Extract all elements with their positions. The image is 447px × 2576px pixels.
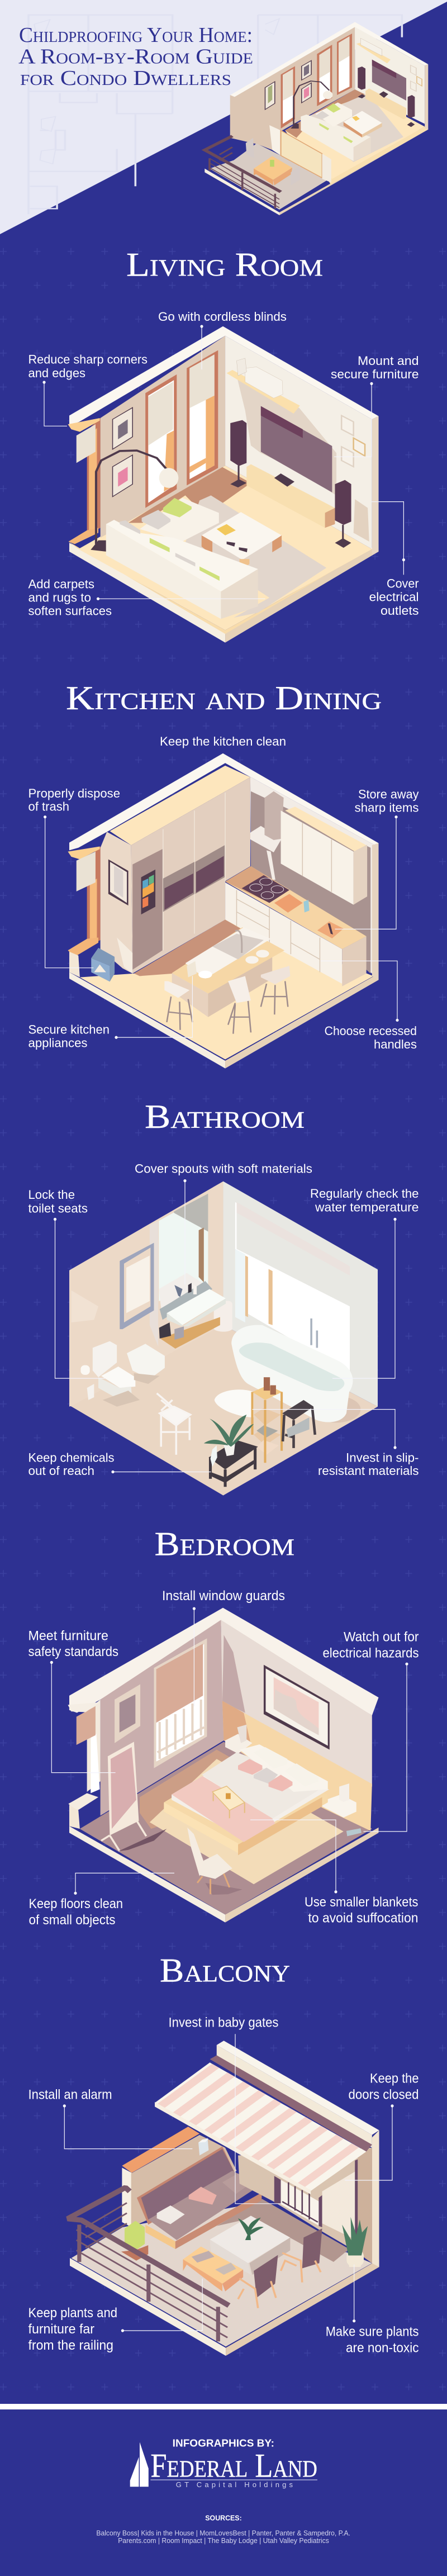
ovens — [163, 845, 225, 912]
callouts: living room: Reduce sharp corners — [28, 353, 148, 367]
callouts: living room: Go with cordless blinds — [158, 310, 287, 324]
green box — [121, 2221, 148, 2261]
floor slab — [68, 466, 379, 643]
tv — [372, 60, 406, 101]
illustration: kitchen — [68, 753, 379, 1069]
callouts: living room: and edges — [28, 366, 85, 380]
large picture — [264, 1665, 330, 1750]
callouts: balcony: Make sure plants — [326, 2324, 419, 2340]
speaker left — [230, 420, 246, 487]
stool — [282, 1400, 315, 1448]
chaise — [140, 498, 219, 543]
floor slab — [70, 2207, 379, 2356]
darker floor by the door — [217, 2199, 349, 2262]
callouts: bedroom: Meet furniture — [28, 1628, 108, 1643]
leader lines: living room — [42, 325, 405, 600]
floor — [69, 1742, 379, 1923]
cutting boards — [274, 894, 344, 938]
sources — [96, 2514, 350, 2545]
left window — [68, 846, 101, 978]
picture — [108, 859, 129, 905]
railing — [205, 136, 281, 208]
callouts: living room: electrical — [369, 590, 419, 604]
console — [365, 88, 406, 119]
callouts: living room: Mount and — [358, 354, 419, 368]
logo: Federal Land: Federal Land — [150, 2447, 317, 2484]
callouts: balcony: Keep the — [370, 2071, 419, 2086]
window — [235, 1202, 350, 1373]
back wall with brick cap — [122, 2127, 236, 2227]
callouts: bedroom: Install window guards — [162, 1588, 285, 1604]
speakers — [358, 67, 365, 90]
callouts: balcony: from the railing — [28, 2338, 113, 2353]
left wall — [101, 1620, 224, 1816]
callouts: bedroom: of small objects — [29, 1913, 115, 1928]
callouts: bathroom: Cover spouts with soft materials — [135, 1161, 312, 1175]
leader lines: balcony — [63, 2034, 394, 2332]
leader lines: bathroom — [54, 1179, 397, 1473]
callouts: bedroom — [28, 1588, 419, 1928]
island — [172, 927, 284, 1017]
callouts: bathroom: Invest in slip- — [346, 1450, 419, 1464]
callouts: bedroom: Keep floors clean — [29, 1896, 123, 1911]
heading: bathroom: Bathroom — [145, 1098, 305, 1135]
wood floor shadow — [134, 919, 245, 976]
illustration: bedroom — [68, 1608, 379, 1923]
lamp — [294, 81, 329, 125]
illustration: bathroom — [69, 1182, 378, 1496]
balcony floor — [210, 144, 328, 210]
right wall edge — [372, 416, 379, 556]
callouts: bathroom: Keep chemicals — [28, 1450, 114, 1464]
alarm — [198, 2138, 208, 2155]
low coffee table — [183, 2246, 243, 2292]
callouts: balcony: are non-toxic — [346, 2340, 419, 2355]
credit label: INFOGRAPHICS BY: — [173, 2437, 274, 2449]
frames — [341, 416, 365, 467]
left window — [68, 1700, 101, 1829]
logo: Federal Land: GT Capital Holdings — [176, 2480, 293, 2489]
striped awning — [155, 2062, 367, 2194]
window 2 — [145, 374, 177, 508]
vanity — [159, 1273, 226, 1349]
wainscot — [222, 1701, 372, 1831]
callouts: kitchen: Choose recessed — [325, 1024, 417, 1038]
callouts: balcony: Keep plants and — [28, 2305, 117, 2321]
callouts: bathroom: water temperature — [315, 1201, 419, 1215]
title — [18, 23, 253, 90]
callouts: living room: secure furniture — [331, 367, 419, 381]
leader lines: bedroom — [50, 1607, 408, 1895]
tv console — [246, 464, 335, 528]
railing — [68, 2188, 229, 2341]
cushions — [142, 498, 192, 530]
callouts: bathroom: toilet seats — [28, 1202, 88, 1215]
title: for Condo Dwellers — [20, 67, 231, 90]
logo: Federal Land — [130, 2442, 317, 2489]
callouts: living room — [28, 310, 419, 618]
callouts: living room: and rugs to — [28, 591, 91, 605]
windows on wall — [281, 66, 295, 129]
toilet — [80, 1341, 165, 1407]
left wall — [101, 336, 225, 538]
callouts: living room: soften surfaces — [28, 604, 112, 618]
counter — [225, 866, 367, 949]
right wall with door — [238, 2130, 379, 2267]
callouts: kitchen: Store away — [358, 787, 419, 801]
wood floor — [140, 1750, 242, 1829]
faint floor plan — [28, 15, 402, 214]
floor — [69, 1325, 378, 1496]
callouts: balcony: Invest in baby gates — [169, 2015, 278, 2030]
hood — [245, 791, 284, 880]
wall cap — [69, 1608, 379, 1715]
towel rack — [120, 1243, 154, 1329]
wall picture — [115, 1685, 140, 1743]
callouts: kitchen: handles — [374, 1037, 417, 1051]
left window frame — [68, 418, 101, 544]
leader lines: kitchen — [44, 815, 399, 1039]
wall cap — [69, 326, 379, 425]
callouts: balcony: furniture far — [28, 2322, 94, 2337]
callouts: bedroom: electrical hazards — [323, 1645, 419, 1661]
bath mat — [215, 1389, 254, 1417]
callouts: living room: Cover — [387, 577, 419, 591]
nightstands — [225, 1725, 356, 1818]
footer background — [0, 2409, 447, 2576]
speaker right — [335, 480, 351, 548]
sofa — [106, 520, 258, 619]
wall cap — [69, 753, 379, 850]
callouts: bedroom: safety standards — [28, 1644, 118, 1659]
shelf — [356, 43, 391, 63]
right wall — [221, 1620, 372, 1787]
table plant — [238, 2218, 264, 2240]
callouts: balcony: doors closed — [349, 2087, 419, 2103]
callouts: bedroom: Use smaller blankets — [305, 1895, 418, 1910]
floor lamp — [91, 450, 178, 552]
callouts: bathroom — [28, 1161, 419, 1478]
tall cabinets — [101, 766, 250, 974]
side table with plant — [204, 1415, 258, 1487]
stove — [242, 875, 289, 903]
coffee table — [202, 512, 282, 570]
callouts: balcony: Install an alarm — [28, 2087, 112, 2103]
callouts: kitchen: sharp items — [355, 800, 419, 815]
callouts: kitchen: Properly dispose — [28, 786, 120, 800]
window 3 — [187, 350, 218, 486]
bathtub — [231, 1318, 360, 1422]
pictures — [113, 407, 132, 497]
callouts: kitchen: appliances — [28, 1036, 87, 1050]
recycling bin — [91, 948, 115, 981]
dining table — [210, 2216, 290, 2275]
heading: kitchen and dining: Kitchen and Dining — [66, 680, 382, 717]
title: A Room-by-Room Guide — [18, 45, 253, 68]
rug — [150, 1759, 344, 1884]
callouts: balcony — [28, 2015, 419, 2355]
chair — [157, 1393, 191, 1455]
snake plant — [342, 2217, 368, 2267]
bench — [137, 2146, 261, 2249]
tv — [261, 406, 332, 492]
sources: Balcony Boss| Kids in the House | MomLovesBest | Panter, Panter & Sampedro, P.A. — [96, 2529, 350, 2537]
callouts: kitchen: of trash — [28, 800, 69, 814]
lower cabinets — [225, 883, 367, 986]
callouts: living room: Add carpets — [28, 577, 94, 591]
heading: balcony: Balcony — [160, 1952, 290, 1989]
illustration: condo overview — [205, 22, 428, 215]
callouts: bathroom: Regularly check the — [310, 1187, 419, 1201]
title: Childproofing Your Home: — [19, 23, 253, 47]
mirror — [101, 1742, 167, 1851]
coffee table — [344, 111, 382, 135]
sources: SOURCES: — [205, 2514, 242, 2522]
wooden shelf — [253, 1377, 282, 1463]
upper cabinets — [281, 807, 367, 905]
balcony furniture — [246, 138, 254, 158]
right wall — [225, 763, 375, 976]
frames — [411, 65, 416, 75]
callouts: kitchen: Secure kitchen — [28, 1023, 110, 1037]
wall and awning band — [210, 2041, 379, 2152]
callouts: kitchen — [28, 734, 419, 1051]
left wall — [69, 1182, 223, 1407]
shelf with books — [227, 358, 300, 414]
breakfast tray — [212, 1786, 245, 1818]
icon: spire — [130, 2442, 149, 2487]
chairs — [238, 2228, 322, 2308]
rug — [186, 495, 326, 618]
chair — [187, 1828, 242, 1895]
heading: bedroom: Bedroom — [154, 1525, 294, 1562]
callouts: bathroom: out of reach — [28, 1464, 94, 1478]
sources: Parents.com | Room Impact | The Baby Lodge | Utah Valley Pediatrics — [118, 2536, 329, 2545]
callouts: bathroom: resistant materials — [318, 1464, 419, 1478]
floor slab — [69, 919, 379, 1069]
footer divider band — [0, 2404, 447, 2409]
stools — [164, 966, 290, 1034]
balcony door — [269, 125, 281, 155]
window with guards — [154, 1638, 207, 1768]
wood floor shadow — [129, 466, 251, 523]
sofa — [301, 115, 370, 161]
callouts: bathroom: Lock the — [28, 1188, 75, 1202]
right wall — [225, 336, 372, 549]
callouts: bedroom: Watch out for — [344, 1630, 419, 1645]
trash can — [214, 1301, 232, 1332]
header light triangle — [0, 0, 447, 234]
illustration: living room — [68, 326, 379, 643]
callouts: living room: outlets — [381, 604, 419, 618]
right wall — [223, 1182, 378, 1407]
callouts: bedroom: to avoid suffocation — [308, 1911, 418, 1926]
power strip — [346, 1828, 362, 1836]
fridge — [132, 849, 163, 970]
callouts: kitchen: Keep the kitchen clean — [160, 734, 286, 748]
bed — [164, 1744, 329, 1855]
illustration: balcony — [68, 2041, 379, 2356]
heading: living room: Living Room — [126, 246, 323, 283]
pictures — [265, 82, 275, 110]
